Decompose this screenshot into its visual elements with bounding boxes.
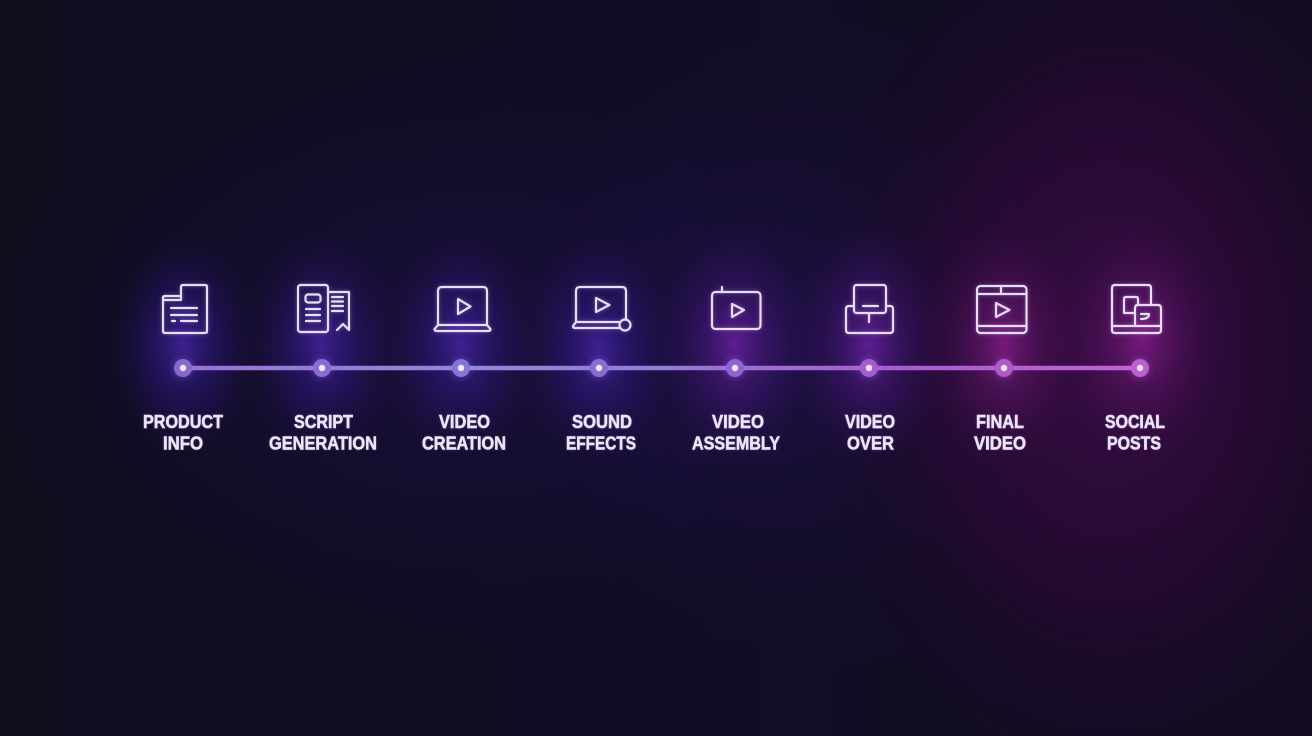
timeline line (183, 364, 1140, 372)
icon: video creation laptop (434, 287, 490, 331)
label: video over: VIDEO (845, 412, 895, 432)
icon: final video player (977, 286, 1026, 333)
label: product info: PRODUCT (143, 412, 223, 432)
label: sound effects: SOUND (572, 412, 632, 432)
icon: script generation booklet (298, 285, 349, 332)
label: video over (845, 412, 895, 454)
label: script generation (269, 412, 377, 454)
glow halos behind the steps (111, 215, 1228, 470)
label: video assembly (692, 412, 780, 454)
label: social posts (1105, 412, 1165, 454)
label: video creation (422, 412, 506, 454)
icon: product info document (163, 285, 207, 333)
label: social posts: POSTS (1107, 434, 1161, 454)
timeline nodes (168, 353, 1155, 383)
icon: video over tray (846, 285, 893, 333)
icon: video assembly screen (712, 287, 760, 329)
label: final video: VIDEO (974, 434, 1026, 454)
label: script generation: GENERATION (269, 434, 377, 454)
label: video creation: VIDEO (439, 412, 490, 432)
label: sound effects (566, 412, 636, 454)
label: sound effects: EFFECTS (566, 434, 636, 454)
label: final video: FINAL (976, 412, 1024, 432)
label: final video (974, 412, 1026, 454)
label: video assembly: VIDEO (712, 412, 764, 432)
label: video over: OVER (847, 434, 894, 454)
label: script generation: SCRIPT (294, 412, 353, 432)
label: product info: INFO (163, 434, 203, 454)
label: social posts: SOCIAL (1105, 412, 1165, 432)
icon: social posts panels (1112, 285, 1161, 333)
label: product info (143, 412, 223, 454)
icon: sound effects laptop with knob (573, 287, 630, 330)
label: video assembly: ASSEMBLY (692, 434, 780, 454)
label: video creation: CREATION (422, 434, 506, 454)
